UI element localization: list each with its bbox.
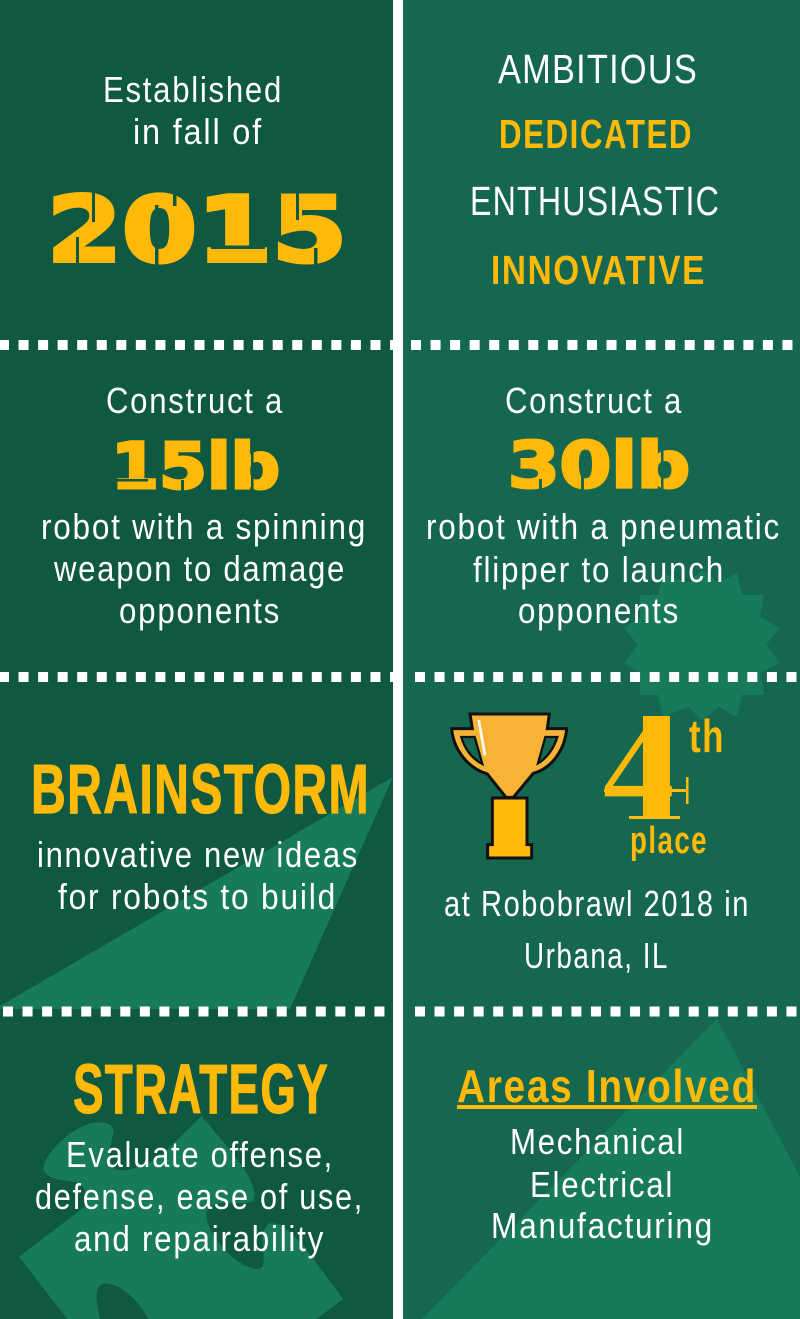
heading: 30lb: 30lb <box>508 429 690 502</box>
text: construct a: Construct a <box>106 380 284 421</box>
text: strategy description: Evaluate offense, <box>66 1134 334 1175</box>
panel: team qualities <box>470 46 720 293</box>
panel: 30lb robot <box>426 380 781 631</box>
text: spinning weapon description <box>41 506 367 631</box>
panel: strategy <box>35 1050 364 1259</box>
text: spinning weapon description: opponents <box>119 590 281 631</box>
panel: areas involved <box>457 1060 757 1246</box>
text: spinning weapon description: robot with a spinning <box>41 506 367 547</box>
word: enthusiastic: ENTHUSIASTIC <box>470 178 720 224</box>
word: innovative: INNOVATIVE <box>491 247 706 293</box>
text: pneumatic flipper description: opponents <box>518 590 680 631</box>
background shape: puzzle piece <box>19 1116 343 1319</box>
text: construct a: Construct a <box>505 380 683 421</box>
text: spinning weapon description: weapon to damage <box>53 548 346 589</box>
background shape: brainstorm triangle <box>0 777 393 1009</box>
heading: 15lb: 15lb <box>111 430 280 503</box>
icon: trophy <box>452 714 567 858</box>
text: robobrawl location: Urbana, IL <box>524 935 669 976</box>
text: brainstorm description <box>37 834 359 917</box>
heading: brainstorm: BRAINSTORM <box>31 750 370 828</box>
text: established in fall of: in fall of <box>133 111 263 152</box>
numeral: 4: 4 <box>602 685 674 851</box>
list: disciplines: Electrical <box>530 1164 674 1205</box>
background shape: 14-point star <box>624 570 780 720</box>
left column background <box>0 0 393 1319</box>
panel: fourth place <box>444 685 750 976</box>
list: disciplines <box>491 1121 714 1246</box>
list: disciplines: Manufacturing <box>491 1205 714 1246</box>
list: disciplines: Mechanical <box>510 1121 685 1162</box>
word: dedicated: DEDICATED <box>499 111 693 157</box>
label: place: place <box>630 820 708 862</box>
text: established in fall of <box>103 69 283 152</box>
panel: brainstorm <box>31 750 370 917</box>
text: pneumatic flipper description: flipper to launch <box>473 549 725 590</box>
text: strategy description <box>35 1134 364 1259</box>
text: strategy description: and repairability <box>74 1218 325 1259</box>
background shape: areas involved triangle <box>422 1019 800 1319</box>
word: ambitious: AMBITIOUS <box>498 46 698 92</box>
text: pneumatic flipper description <box>426 506 781 631</box>
ordinal: th: th <box>689 710 725 762</box>
heading: 2015: 2015 <box>47 178 347 283</box>
text: robobrawl location <box>444 883 750 976</box>
heading: strategy: STRATEGY <box>73 1050 329 1128</box>
text: strategy description: defense, ease of use, <box>35 1176 364 1217</box>
panel: 15lb robot <box>41 380 367 631</box>
panel: established <box>47 69 347 283</box>
text: brainstorm description: innovative new ideas <box>37 834 359 875</box>
text: brainstorm description: for robots to build <box>58 876 337 917</box>
text: established in fall of: Established <box>103 69 283 110</box>
right column background <box>403 0 800 1319</box>
